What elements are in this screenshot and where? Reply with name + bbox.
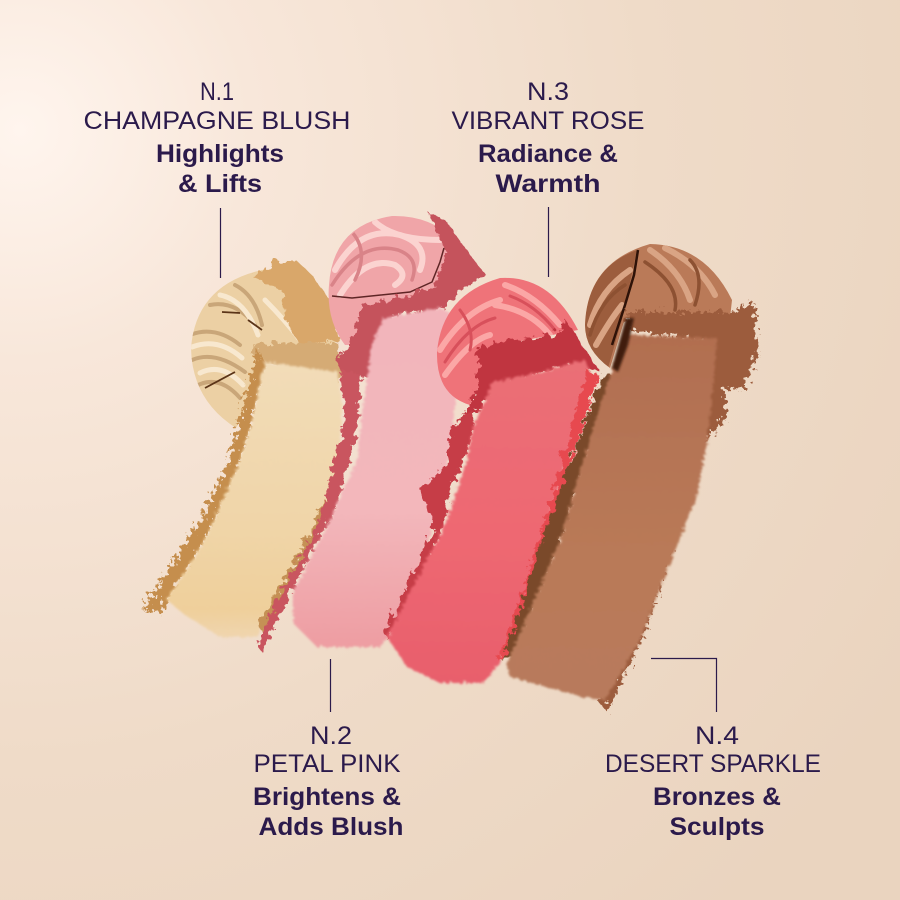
smear body xyxy=(167,362,342,637)
swatch: N.4 desert sparkle xyxy=(503,244,758,712)
label: N.4: DESERT SPARKLE xyxy=(605,750,821,778)
right edge crumbs xyxy=(258,470,336,632)
label: N.4 xyxy=(605,722,821,841)
pan disc xyxy=(328,216,448,345)
label: N.3: VIBRANT ROSE xyxy=(452,107,644,135)
label: N.4: Sculpts xyxy=(670,813,764,841)
swatch: N.1 champagne blush xyxy=(142,262,342,637)
label: N.1: CHAMPAGNE BLUSH xyxy=(84,107,350,135)
crumbled left edge xyxy=(142,350,268,612)
label: N.1: & Lifts xyxy=(178,170,262,198)
pan disc xyxy=(585,244,732,368)
label: N.1: N.1 xyxy=(200,78,234,106)
swatch: N.2 petal pink xyxy=(256,212,485,652)
label: N.3: N.3 xyxy=(527,78,569,106)
label: N.2: Adds Blush xyxy=(258,813,404,841)
crumbled top xyxy=(462,320,600,415)
leader line: N.4 xyxy=(651,658,716,712)
swatch: N.3 vibrant rose xyxy=(385,278,600,683)
label: N.2 xyxy=(253,722,404,841)
leader line: N.3 xyxy=(548,207,550,277)
crumbled surround xyxy=(597,302,758,712)
smear body xyxy=(387,360,592,683)
label: N.2: N.2 xyxy=(310,722,352,750)
smear body xyxy=(293,308,460,647)
label: N.1 xyxy=(84,78,350,198)
crumbled top xyxy=(250,262,338,345)
label: N.4: N.4 xyxy=(695,722,739,750)
label: N.3: Radiance & xyxy=(478,140,618,168)
crumbled left edge xyxy=(256,370,362,652)
crumbled top xyxy=(336,212,485,382)
leader line: N.2 xyxy=(330,659,332,712)
shadow under disc xyxy=(612,318,634,372)
label: N.4: Bronzes & xyxy=(653,783,781,811)
label: N.3 xyxy=(452,78,644,198)
smear body xyxy=(507,335,717,700)
label: N.2: Brightens & xyxy=(253,783,401,811)
leader line: N.1 xyxy=(220,208,222,278)
pan disc xyxy=(190,268,336,428)
label: N.2: PETAL PINK xyxy=(254,750,401,778)
label: N.3: Warmth xyxy=(496,170,600,198)
crumbled left edge xyxy=(385,410,475,640)
crumbled left edge xyxy=(503,372,616,662)
label: N.1: Highlights xyxy=(156,140,284,168)
pan disc xyxy=(437,278,578,405)
